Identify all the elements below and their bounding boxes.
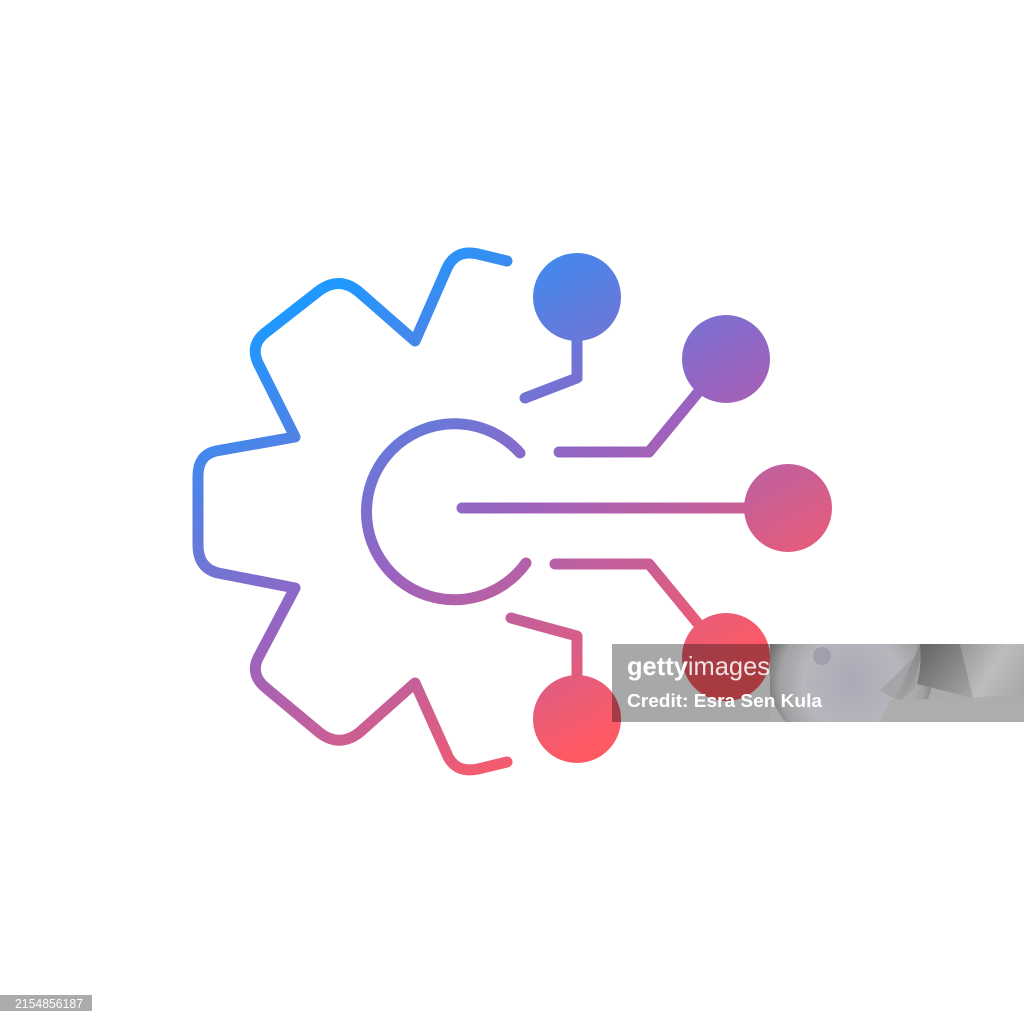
connector lines [462,335,750,680]
watermark credit: Credit: Esra Sen Kula [627,691,823,711]
watermark banner [612,644,1024,722]
watermark logo: gettyimages [627,651,770,681]
image id tag: 2154856187 [15,997,83,1011]
icon: gear with network nodes [198,253,832,770]
network node circles [533,253,832,763]
gear centre ring [366,424,526,600]
image id tag [0,995,92,1011]
gear outline [198,253,507,770]
